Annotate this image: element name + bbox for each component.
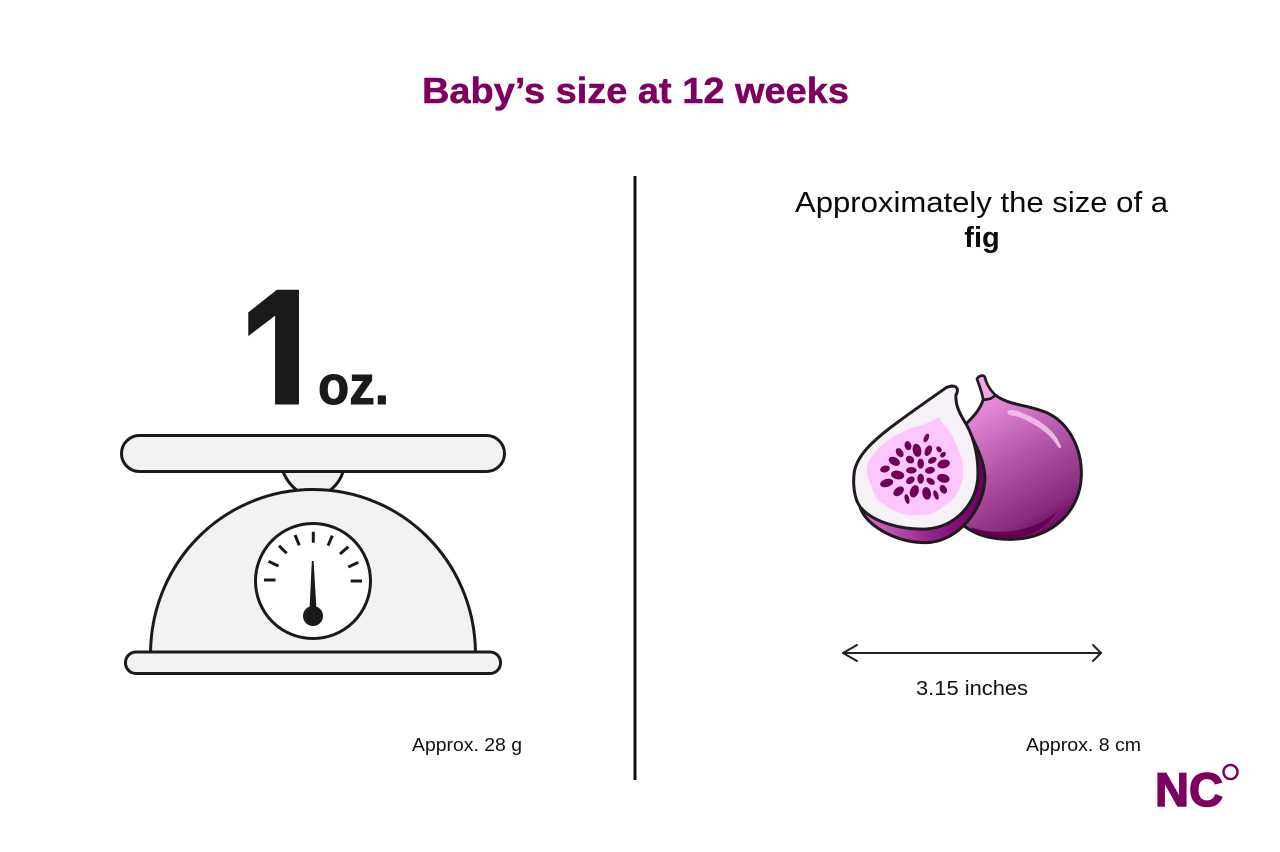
icon: kitchen scale [122,436,504,674]
fig seeds [879,433,951,504]
caption: centimetres: Approx. 8 cm [1026,735,1141,755]
icon: fig [854,376,1081,543]
weight value: 1 oz.: oz. [318,354,389,416]
arrow: width [843,645,1101,661]
weight value: 1 oz.: 1 [238,249,328,470]
dial needle [303,561,323,626]
comparison text: fig [964,222,1000,254]
divider [634,176,636,780]
dial ticks [264,532,362,581]
panel: size comparison [795,187,1169,755]
weight value: 1 oz. [248,290,386,405]
whole fig [957,376,1081,539]
size label: inches: 3.15 inches [916,678,1028,700]
logo: NC [1155,763,1223,816]
panel: weight [122,249,522,755]
title: Baby’s size at 12 weeks [422,70,849,111]
cut half [854,386,985,543]
caption: grams: Approx. 28 g [412,735,522,755]
fig flesh [867,417,963,515]
comparison text [795,187,1169,254]
comparison text: Approximately the size of a [795,187,1169,219]
